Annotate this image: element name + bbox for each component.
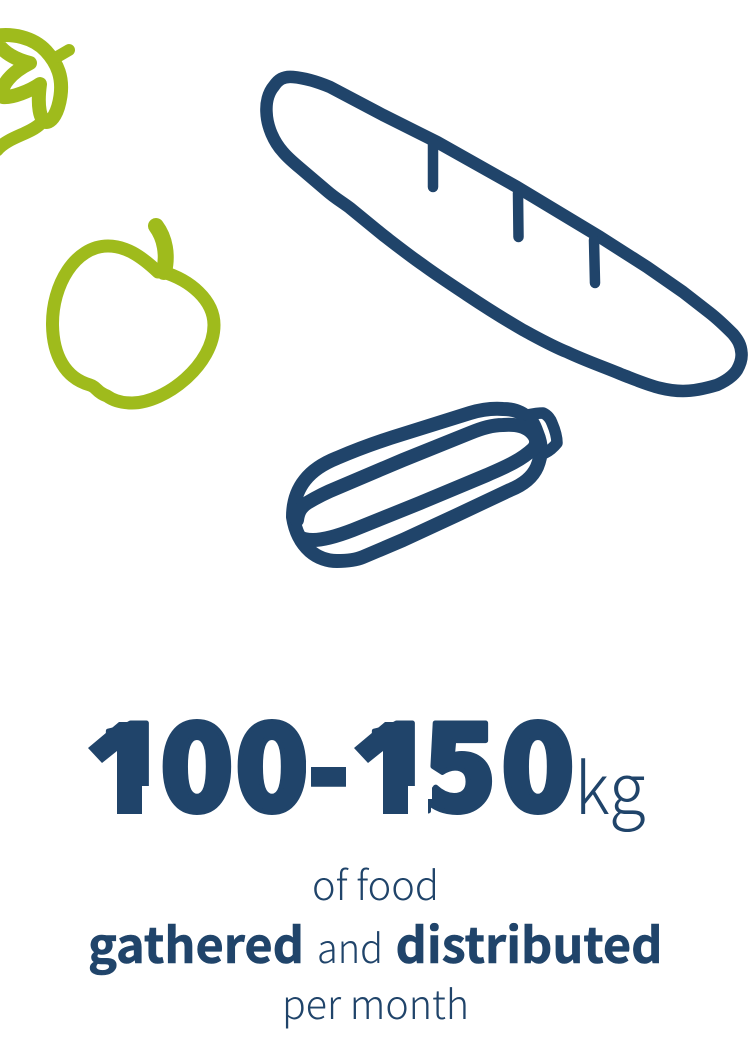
text: of food: of food [312, 854, 439, 912]
icon: tomato [0, 35, 69, 150]
icon: apple [52, 226, 214, 403]
text: distributed: distributed [396, 907, 662, 978]
text: gathered and distributed [88, 907, 662, 978]
icon: zucchini [293, 409, 557, 561]
text: and: and [317, 917, 383, 975]
text: per month: per month [282, 973, 469, 1031]
headline figure: 100-150 [96, 675, 575, 846]
unit: kg: kg [574, 734, 646, 835]
text: gathered: gathered [88, 907, 304, 978]
icon: baguette [266, 77, 742, 391]
